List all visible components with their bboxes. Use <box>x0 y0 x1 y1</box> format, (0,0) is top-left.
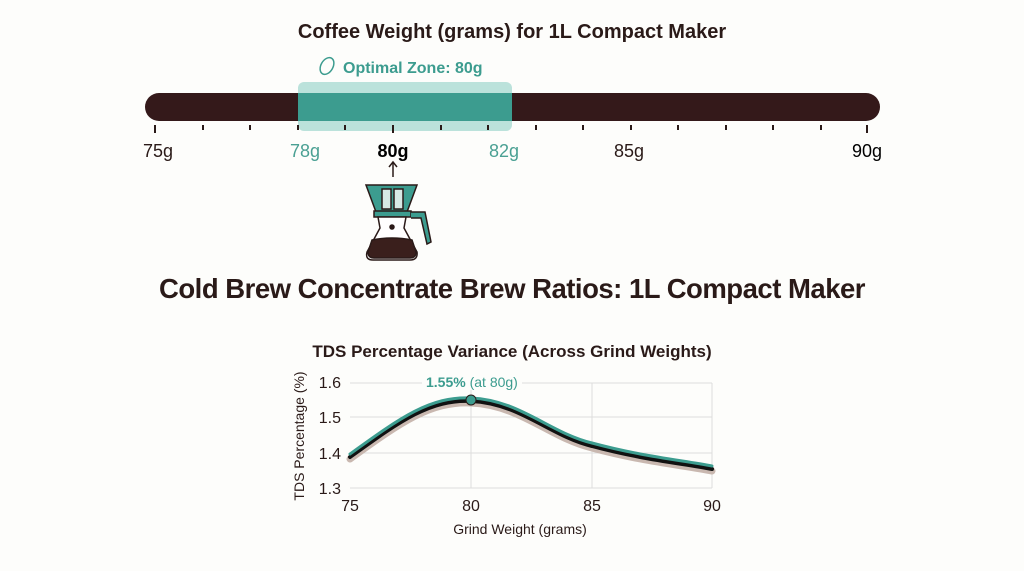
optimal zone label <box>317 55 483 77</box>
chart: TDS variance: 85 <box>583 498 601 515</box>
chart title: TDS Percentage Variance (Across Grind Weights) <box>312 342 712 361</box>
chart: TDS variance: Grind Weight (grams) <box>453 521 587 537</box>
chart: TDS variance: 1.6 <box>319 375 341 392</box>
callout <box>422 372 522 405</box>
optimal zone <box>298 82 512 131</box>
main title: Cold Brew Concentrate Brew Ratios: 1L Compact Maker <box>159 273 865 304</box>
chart: TDS variance: 80 <box>462 498 480 515</box>
tick labels: 80g <box>377 141 409 161</box>
icon: coffee maker <box>366 185 431 260</box>
tick labels <box>143 141 882 161</box>
chart: TDS variance <box>291 342 721 537</box>
chart: TDS variance: TDS Percentage (%) <box>291 371 307 501</box>
chart: TDS variance: 75 <box>341 498 359 515</box>
chart: TDS variance: 1.3 <box>319 481 341 498</box>
tick labels: 82g <box>489 141 519 161</box>
curve <box>350 398 712 471</box>
tick labels: 90g <box>852 141 882 161</box>
arrow <box>389 162 397 177</box>
optimal zone label: Optimal Zone: 80g <box>343 60 483 77</box>
tick labels: 75g <box>143 141 173 161</box>
callout: 1.55% (at 80g) <box>426 374 518 390</box>
tick labels: 78g <box>290 141 320 161</box>
title: coffee weight: Coffee Weight (grams) for 1L Compact Maker <box>298 21 726 43</box>
chart: TDS variance: 90 <box>703 498 721 515</box>
chart: TDS variance: 1.4 <box>319 446 341 463</box>
weight scale <box>143 56 882 261</box>
tick labels: 85g <box>614 141 644 161</box>
chart: TDS variance: 1.5 <box>319 410 341 427</box>
